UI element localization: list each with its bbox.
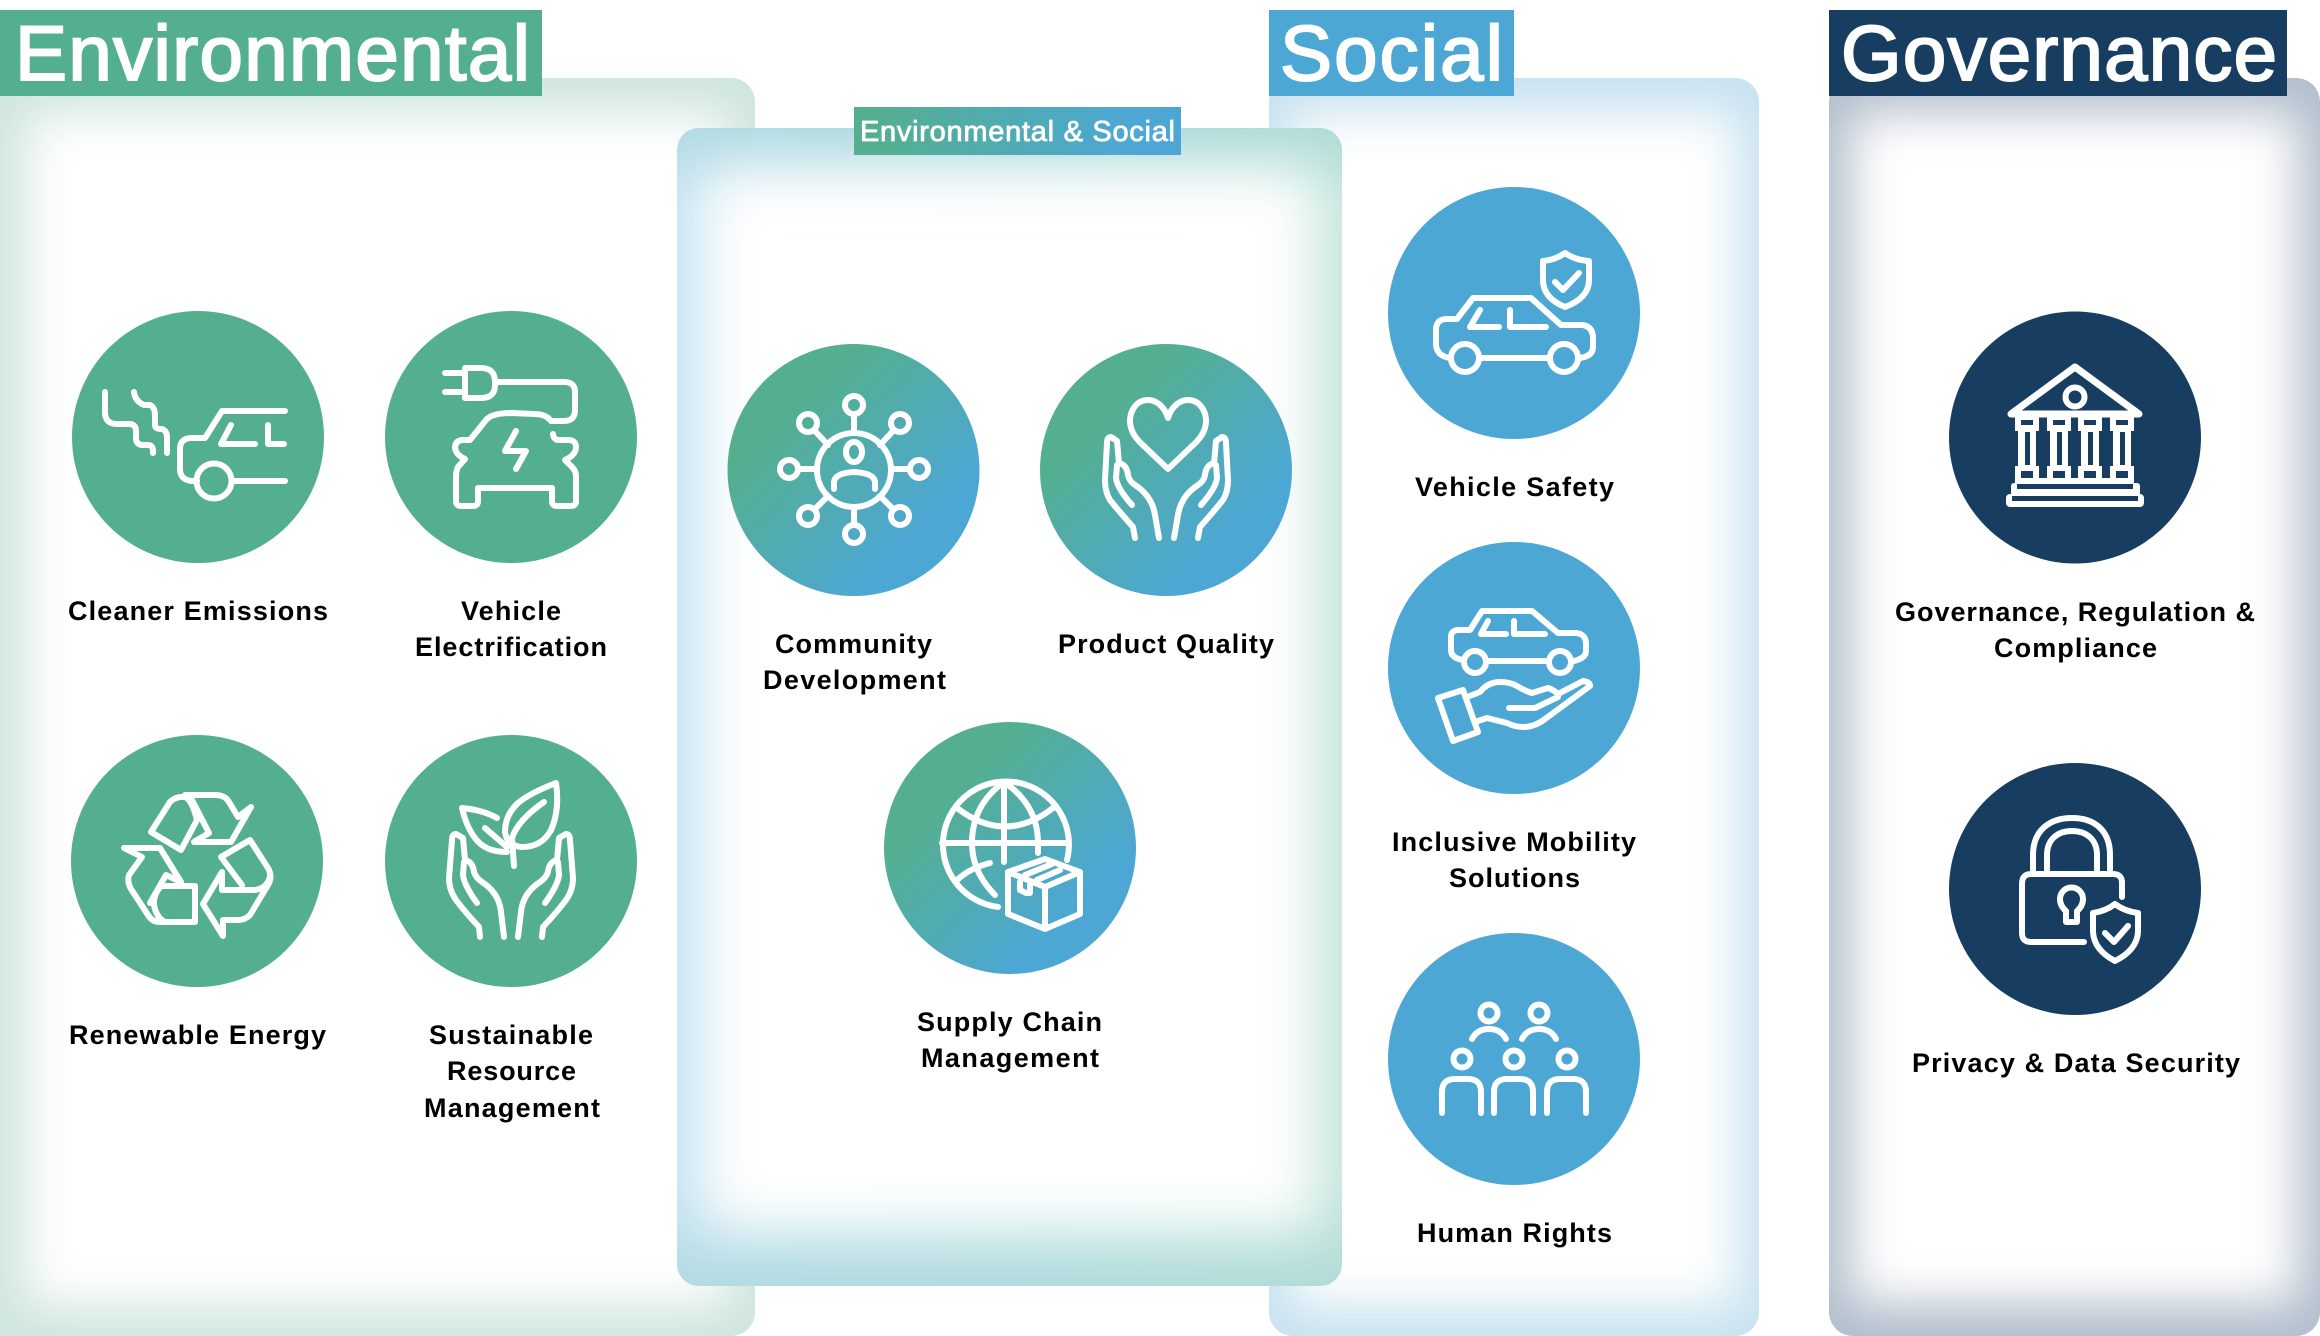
label: Product Quality	[1058, 629, 1274, 659]
icon: government building	[1949, 312, 2201, 564]
label: Inclusive Mobility	[1392, 827, 1636, 857]
item: Community Development	[728, 344, 980, 695]
label: Governance, Regulation &	[1895, 597, 2255, 627]
label: Management	[424, 1093, 600, 1123]
label	[763, 629, 946, 695]
icon: globe and parcel	[884, 722, 1136, 974]
item: Governance, Regulation and Compliance	[1895, 312, 2255, 663]
icon: recycling arrows	[71, 735, 323, 987]
label: Compliance	[1994, 633, 2157, 663]
label: Supply Chain	[917, 1007, 1102, 1037]
icon: car exhaust	[72, 311, 324, 563]
panel: environmental and social	[677, 128, 1342, 1286]
icon: car with shield	[1388, 187, 1640, 439]
icon: electric car with plug	[385, 311, 637, 563]
label: Renewable Energy	[69, 1020, 326, 1050]
icon: group of people	[1388, 933, 1640, 1185]
panel: social	[1269, 78, 1759, 1336]
heading: Social: Social	[1280, 9, 1503, 97]
panel: environmental	[0, 78, 755, 1336]
label: Solutions	[1449, 863, 1580, 893]
item: Vehicle Safety	[1388, 187, 1640, 502]
panel: governance	[1829, 78, 2320, 1336]
item: Inclusive Mobility Solutions	[1388, 542, 1640, 893]
heading: Environmental: Environmental	[15, 9, 530, 97]
icon: car above an open hand	[1388, 542, 1640, 794]
item: Privacy and Data Security	[1912, 763, 2240, 1078]
label: Human Rights	[1417, 1218, 1612, 1248]
label: Privacy & Data Security	[1912, 1048, 2240, 1078]
item: Vehicle Electrification	[385, 311, 637, 662]
label: Vehicle	[461, 596, 561, 626]
item: Sustainable Resource Management	[385, 735, 637, 1123]
label: Resource	[447, 1056, 576, 1086]
label: Development	[763, 665, 946, 695]
label	[917, 1007, 1102, 1073]
icon: community network	[728, 344, 980, 596]
item: Product Quality	[1040, 344, 1292, 659]
heading: Governance: Governance	[1841, 9, 2277, 97]
item: Cleaner Emissions	[68, 311, 328, 626]
label	[1392, 827, 1636, 893]
icon: hands holding a plant	[385, 735, 637, 987]
heading: Environmental and Social	[854, 107, 1181, 155]
icon: hands holding a heart	[1040, 344, 1292, 596]
label: Electrification	[415, 632, 607, 662]
label	[415, 596, 607, 662]
item: Human Rights	[1388, 933, 1640, 1248]
icon: padlock with shield	[1949, 763, 2201, 1015]
label: Vehicle Safety	[1415, 472, 1614, 502]
label: Management	[921, 1043, 1099, 1073]
label	[1895, 597, 2255, 663]
heading: Environmental and Social: Environmental & Social	[860, 116, 1175, 148]
item: Renewable Energy	[69, 735, 326, 1050]
label	[424, 1020, 600, 1123]
item: Supply Chain Management	[884, 722, 1136, 1073]
label: Sustainable	[429, 1020, 593, 1050]
label: Cleaner Emissions	[68, 596, 328, 626]
label: Community	[775, 629, 932, 659]
